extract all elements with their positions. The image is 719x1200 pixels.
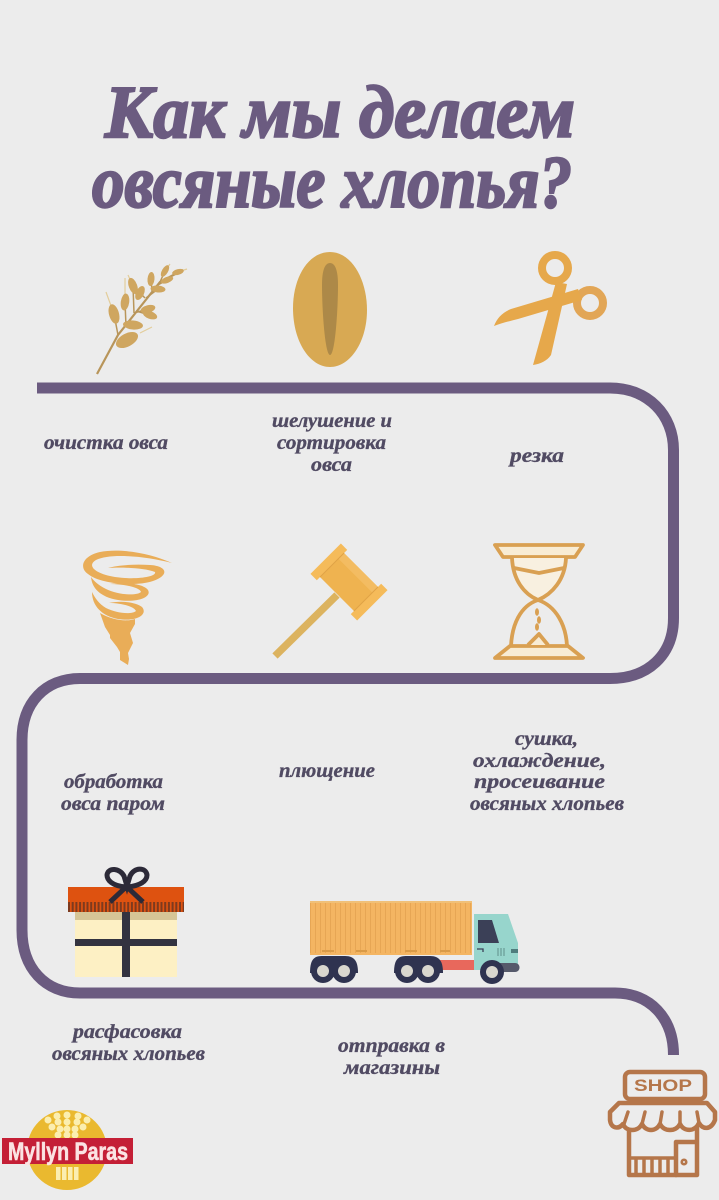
icon: gift box — [68, 869, 184, 977]
title — [92, 72, 575, 224]
label: резка: резка — [508, 445, 564, 467]
label: шелушение и сортировка овса: шелушение и — [272, 410, 392, 432]
label: расфасовка овсяных хлопьев: расфасовка — [71, 1021, 182, 1043]
label: расфасовка овсяных хлопьев: овсяных хлопьев — [52, 1043, 205, 1065]
label: шелушение и сортировка овса — [272, 410, 392, 476]
label: отправка в магазины: отправка в — [338, 1035, 445, 1057]
winding process path — [22, 388, 674, 1055]
label: сушка, охлаждение, просеивание овсяных хлопьев — [470, 728, 624, 815]
label: сушка, охлаждение, просеивание овсяных хлопьев: сушка, — [515, 728, 578, 750]
icon: scissors — [494, 255, 603, 365]
label: шелушение и сортировка овса: овса — [311, 454, 352, 476]
title: Как мы делаем — [104, 72, 575, 154]
icon: shop: SHOP — [634, 1076, 692, 1095]
label: сушка, охлаждение, просеивание овсяных хлопьев: охлаждение, — [473, 750, 606, 772]
label: отправка в магазины — [338, 1035, 445, 1079]
label: обработка овса паром: овса паром — [61, 793, 165, 815]
label: сушка, охлаждение, просеивание овсяных хлопьев: просеивание — [474, 771, 605, 793]
label: обработка овса паром: обработка — [64, 771, 163, 793]
icon: shop — [610, 1072, 715, 1175]
icon: oat sprig — [97, 264, 187, 374]
title: овсяные хлопья? — [92, 142, 572, 224]
icon: truck — [310, 901, 520, 984]
icon: hourglass — [495, 545, 583, 658]
label: плющение: плющение — [279, 760, 375, 782]
logo: Myllyn Paras — [2, 1110, 133, 1190]
icon: oat grain — [293, 252, 367, 367]
logo: Myllyn Paras: Myllyn Paras — [8, 1138, 128, 1166]
label: очистка овса: очистка овса — [44, 432, 168, 454]
label: обработка овса паром — [61, 771, 165, 815]
icon: gavel — [275, 543, 388, 656]
label: расфасовка овсяных хлопьев — [52, 1021, 205, 1065]
label: сушка, охлаждение, просеивание овсяных хлопьев: овсяных хлопьев — [470, 793, 624, 815]
label: шелушение и сортировка овса: сортировка — [277, 432, 386, 454]
label: отправка в магазины: магазины — [343, 1057, 440, 1079]
icon: steam tornado — [83, 551, 172, 665]
